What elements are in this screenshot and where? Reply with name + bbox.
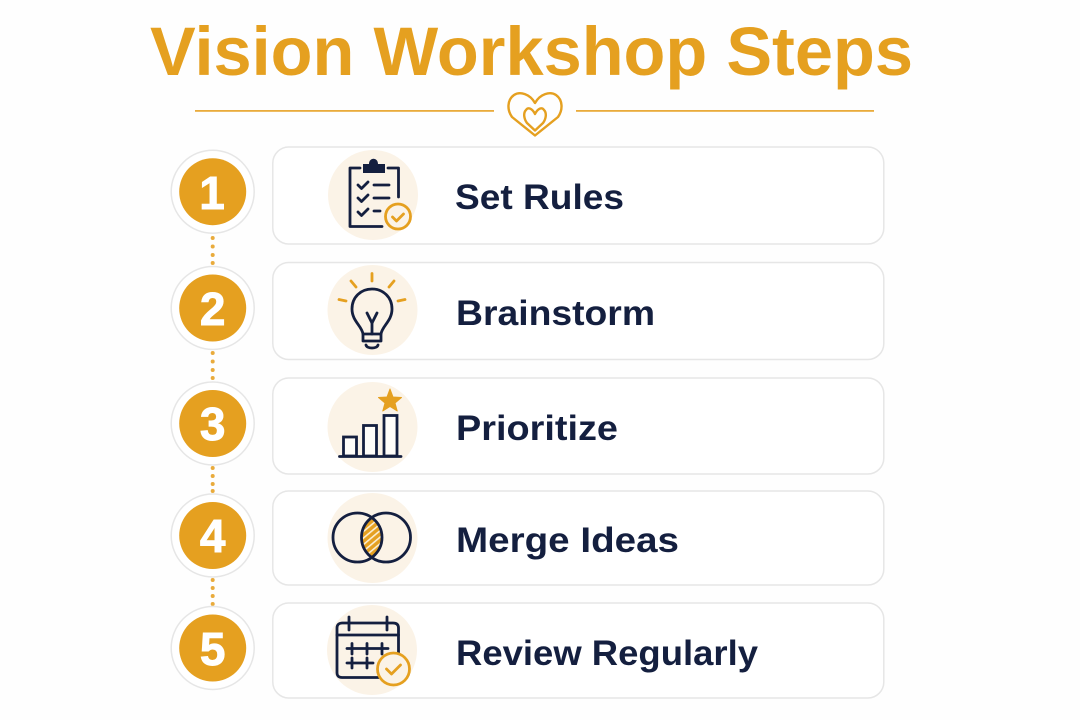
step 2	[171, 262, 884, 360]
step 3	[171, 378, 884, 474]
number badge 2	[171, 266, 254, 350]
step 5	[171, 603, 884, 698]
number badge 3: 3	[200, 398, 225, 450]
label 4: Merge Ideas	[456, 521, 679, 560]
card 1	[273, 147, 884, 244]
card 2	[273, 262, 884, 360]
icon: double heart	[508, 93, 562, 136]
number badge 5	[171, 606, 254, 690]
number badge 1: 1	[199, 167, 225, 219]
number badge 1	[171, 150, 254, 233]
label 5: Review Regularly	[456, 634, 759, 673]
number badge 3	[171, 382, 254, 465]
icon: clipboard checklist	[328, 150, 418, 240]
step 4	[171, 491, 884, 585]
step connector dots	[211, 236, 215, 606]
number badge 2: 2	[200, 283, 225, 335]
card 3	[273, 378, 884, 474]
icon: bar chart with star	[328, 382, 418, 472]
label 1: Set Rules	[455, 178, 624, 217]
icon: overlapping circles	[328, 493, 418, 583]
icon: light bulb	[328, 265, 418, 355]
step 1	[171, 147, 884, 244]
title divider with heart	[195, 93, 874, 136]
number badge 4: 4	[200, 510, 226, 562]
label 2: Brainstorm	[456, 294, 655, 333]
label 3: Prioritize	[456, 409, 618, 448]
card 5	[273, 603, 884, 698]
title: Vision Workshop Steps	[150, 13, 913, 90]
card 4	[273, 491, 884, 585]
number badge 5: 5	[200, 623, 225, 675]
number badge 4	[171, 494, 254, 577]
icon: calendar with check	[327, 605, 417, 695]
